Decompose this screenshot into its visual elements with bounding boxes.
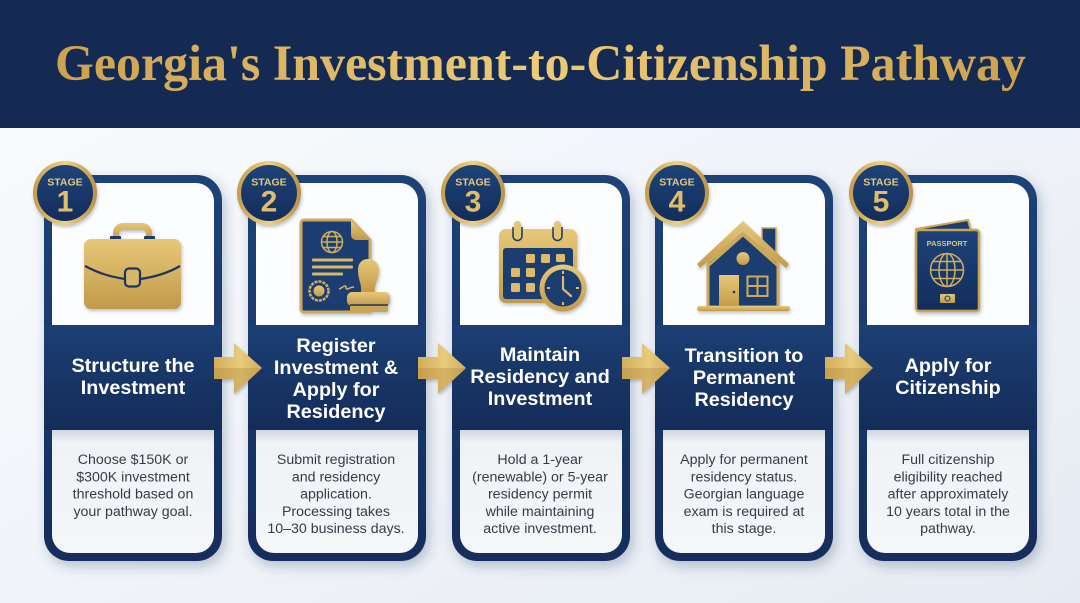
icon: passport [916,220,979,311]
panel: stage 5 [849,161,1037,561]
text: stage 4 description: this stage. [712,521,776,537]
arrow: stage 4 to 5 [825,343,873,394]
heading: stage 3: Investment [488,388,593,410]
text: stage 3 description: (renewable) or 5-year [472,469,608,485]
card frame 3 [452,175,630,561]
text: stage 2 description: 10–30 business days. [267,521,405,537]
heading: stage 2: Apply for [293,379,380,401]
text: stage 4 description: exam is required at [684,504,804,520]
arrow: stage 3 to 4 [622,343,670,394]
arrow: stage 1 to 2 [214,343,262,394]
text: stage 3 description: Hold a 1-year [497,452,583,468]
card frame 4 [655,175,833,561]
badge: stage 2: 2 [261,186,277,218]
panel: stage 1 [33,161,222,561]
badge: stage 5 [849,161,913,225]
badge: stage 4: 4 [669,186,686,218]
heading: stage 5: Apply for [905,355,992,377]
badge: stage 1: STAGE [47,176,83,188]
text: stage 3 description: residency permit [488,487,592,503]
text: stage 5 description: eligibility reached [894,469,1002,485]
badge: stage 2: STAGE [251,176,287,188]
text: stage 4 description: Apply for permanent [680,452,808,468]
badge: stage 1 [33,161,97,225]
panel: stage 2 [237,161,426,561]
text: stage 2 description: and residency [292,469,381,485]
card frame 2 [248,175,426,561]
heading: stage 3: Maintain [500,344,580,366]
card frame 1 [44,175,222,561]
text: stage 3 description: while maintaining [485,504,594,520]
text: stage 5 description: pathway. [920,521,976,537]
icon: passport: PASSPORT [927,239,968,248]
badge: stage 5: STAGE [863,176,899,188]
icon: document and stamp [301,220,390,312]
icon: briefcase [84,223,181,309]
heading: stage 2: Investment & [274,357,398,379]
text: stage 4 description: residency status. [691,469,797,485]
icon: calendar and clock [499,221,586,312]
badge: stage 2 [237,161,301,225]
text: stage 3 description: active investment. [483,521,597,537]
heading: stage 4: Permanent [693,367,796,389]
text: stage 4 description: Georgian language [684,487,804,503]
badge: stage 4: STAGE [659,176,695,188]
text: stage 1 description: $300K investment [76,469,190,485]
text: stage 2 description: Processing takes [282,504,390,520]
text: stage 5 description: 10 years total in the [886,504,1010,520]
text: stage 1 description: your pathway goal. [73,504,193,520]
panel: stage 4 [645,161,833,561]
badge: stage 1: 1 [57,186,73,218]
heading: stage 1: Structure the [71,355,195,377]
badge: stage 4 [645,161,709,225]
badge: stage 3: 3 [465,186,481,218]
text: stage 2 description: application. [300,487,372,503]
title: Georgia's Investment-to-Citizenship Pathway [55,36,1026,92]
panel: stage 3 [441,161,630,561]
heading: stage 3: Residency and [470,366,610,388]
text: stage 2 description: Submit registration [277,452,395,468]
badge: stage 5: 5 [873,186,889,218]
heading: stage 1: Investment [81,377,186,399]
heading: stage 5: Citizenship [895,377,1001,399]
card frame 5 [859,175,1037,561]
badge: stage 3 [441,161,505,225]
header banner [0,0,1080,128]
arrow: stage 2 to 3 [418,343,466,394]
icon: house [697,221,790,311]
text: stage 5 description: Full citizenship [901,452,995,468]
badge: stage 3: STAGE [455,176,491,188]
text: stage 1 description: threshold based on [73,487,193,503]
text: stage 5 description: after approximately [888,487,1009,503]
heading: stage 4: Transition to [685,345,803,367]
heading: stage 2: Register [296,335,376,357]
text: stage 1 description: Choose $150K or [78,452,188,468]
heading: stage 2: Residency [287,401,385,423]
heading: stage 4: Residency [695,389,793,411]
